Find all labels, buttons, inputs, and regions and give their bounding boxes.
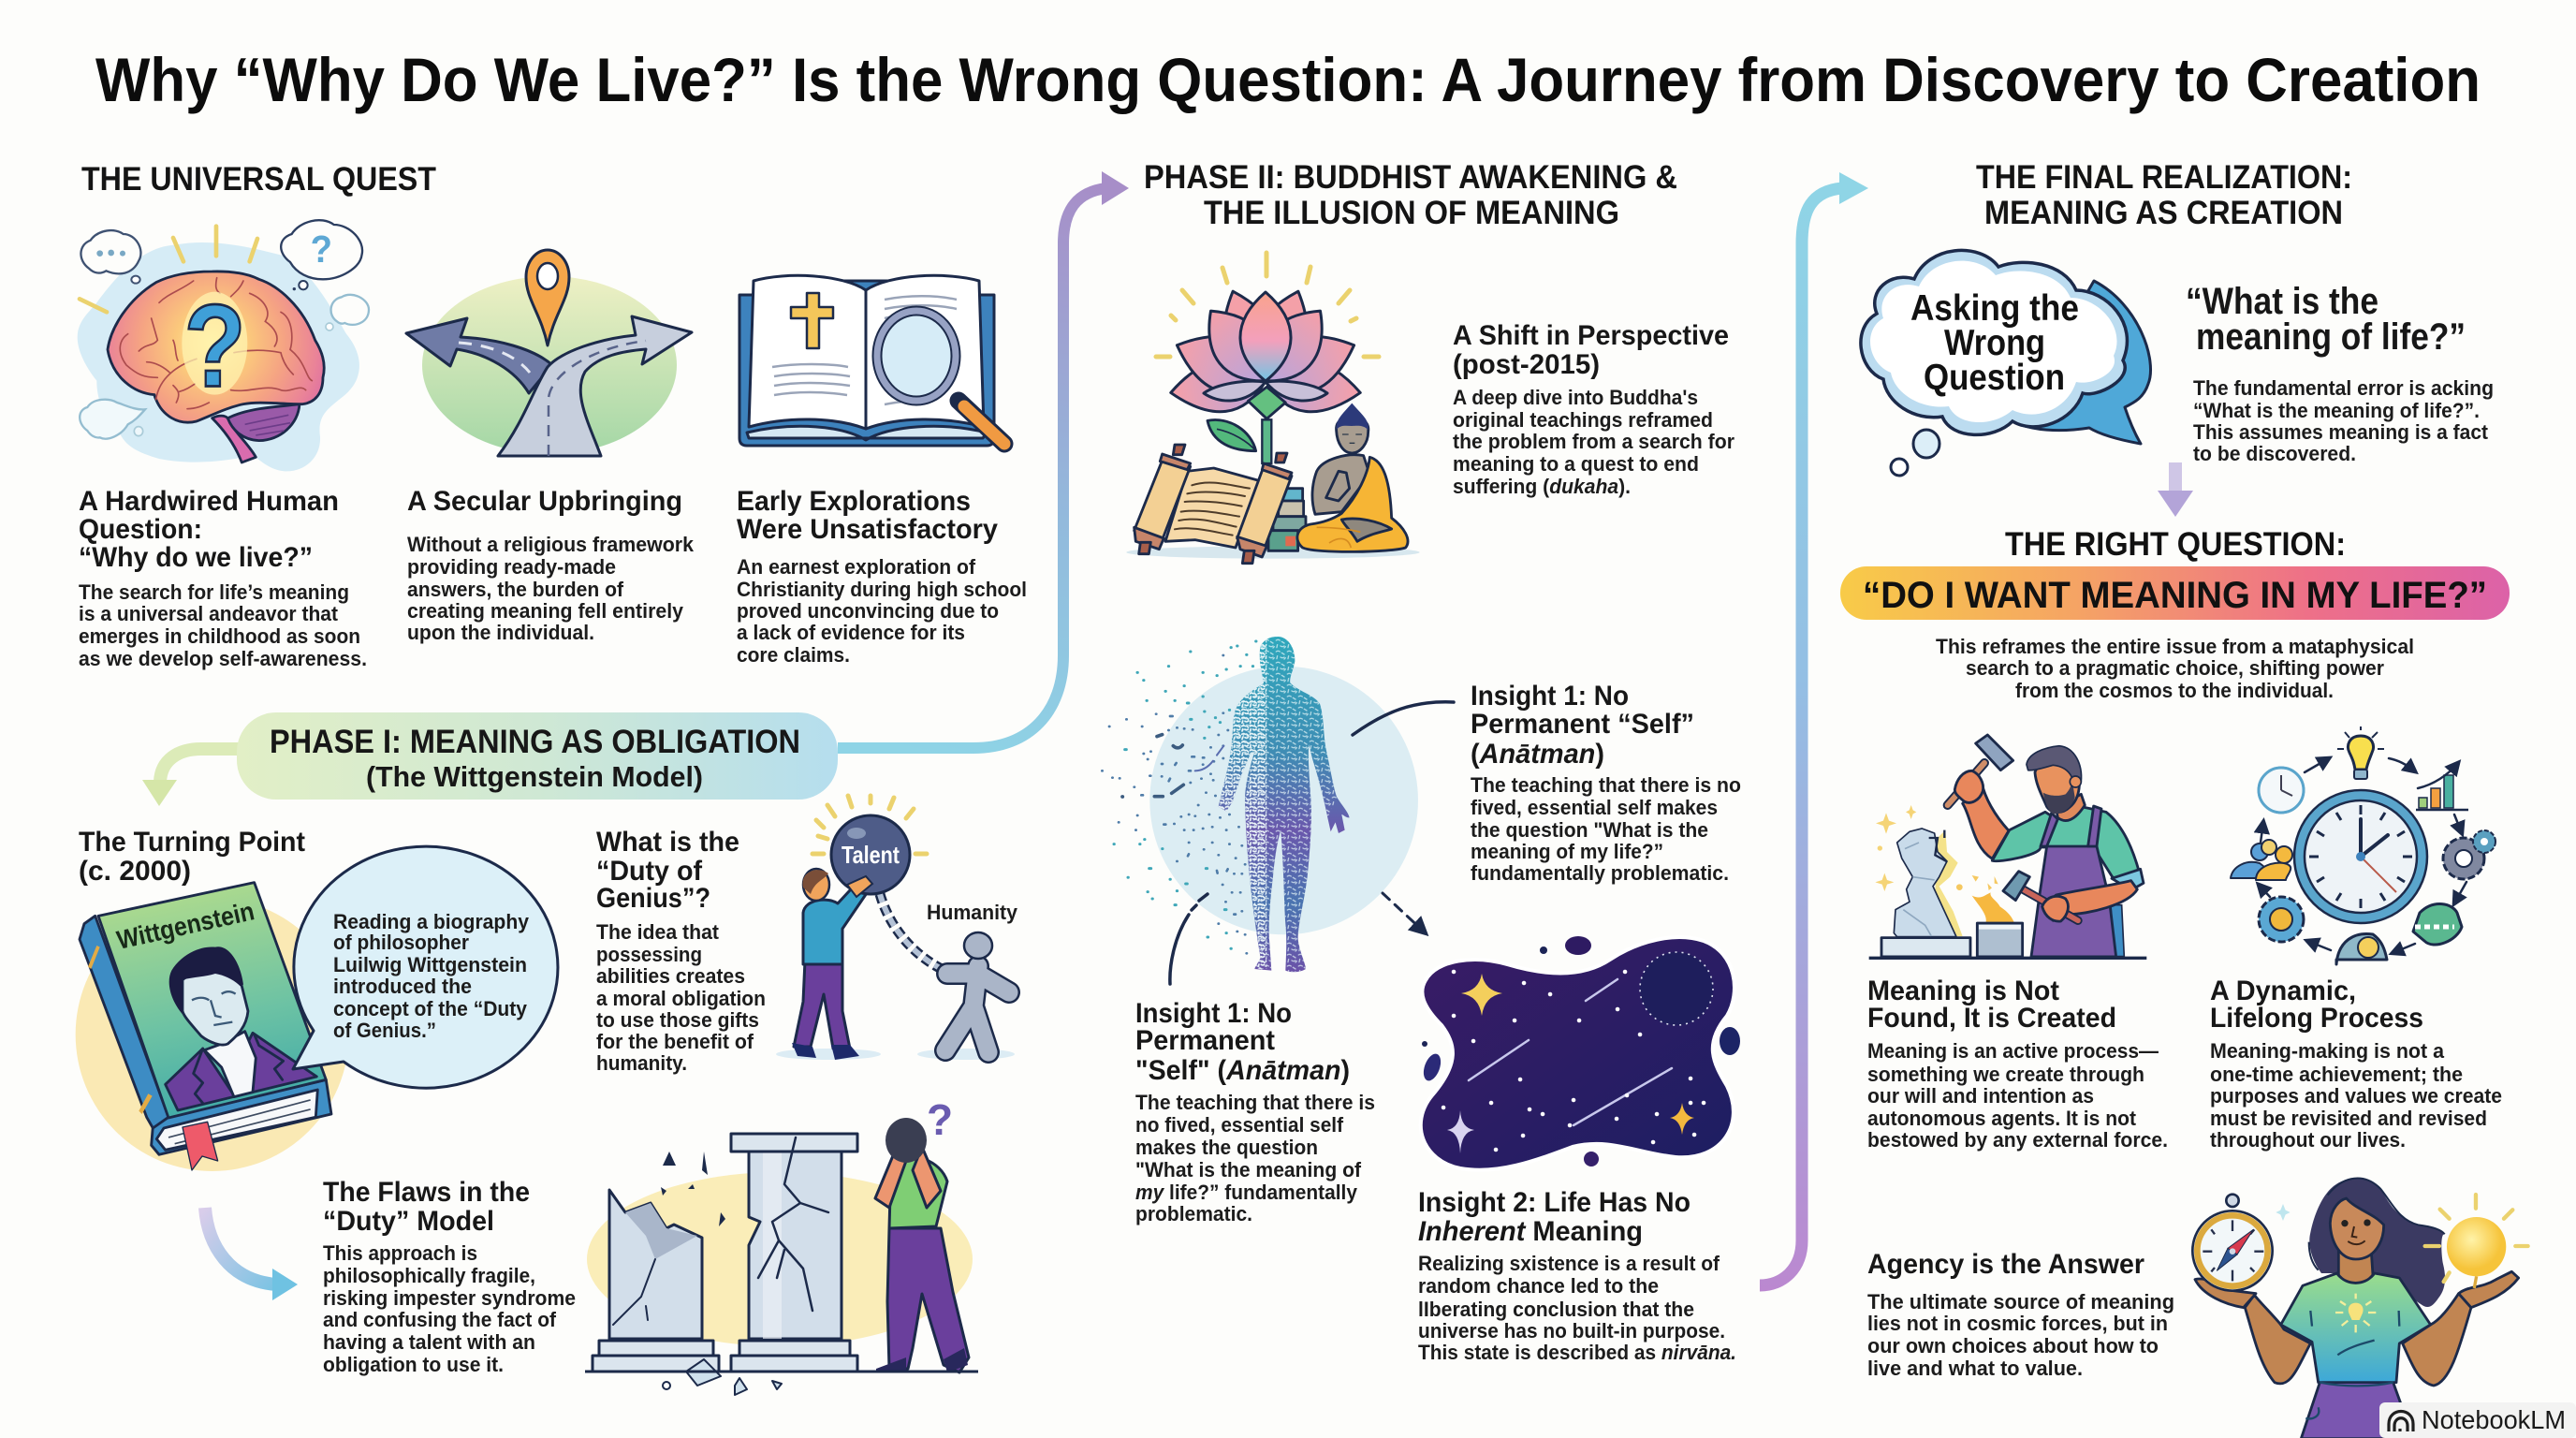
text block: secular upbringing: providing ready-made <box>407 555 616 579</box>
text block: duty of genius: “Duty of <box>596 856 703 887</box>
text block: duty of genius: humanity. <box>596 1051 687 1075</box>
text block: a shift in perspective: the problem from a search for <box>1453 430 1734 453</box>
text block: meaning is not found: bestowed by any external force. <box>1867 1128 2168 1152</box>
text block: secular upbringing: Without a religious framework <box>407 533 694 556</box>
text block: flaws in the duty model: This approach is <box>323 1241 477 1265</box>
text block: secular upbringing <box>407 486 694 644</box>
icon: open bible with magnifying glass <box>739 275 1004 446</box>
text block: agency is the answer: our own choices about how to <box>1867 1334 2159 1357</box>
icon: lotus flower <box>1156 253 1379 418</box>
section heading: The Universal Quest: THE UNIVERSAL QUEST <box>81 161 436 198</box>
text block: flaws in the duty model <box>323 1177 576 1376</box>
arrow: down to right question <box>2158 462 2193 517</box>
text block: dynamic lifelong process: throughout our lives. <box>2210 1128 2406 1152</box>
text block: flaws in the duty model: and confusing the fact of <box>323 1308 556 1331</box>
section heading: final realization: THE FINAL REALIZATION: <box>1976 159 2352 196</box>
text block: early explorations: a lack of evidence for its <box>737 621 965 644</box>
text block: insight 1 right: the question "What is the <box>1471 818 1708 842</box>
title: Why “Why Do We Live?” Is the Wrong Question: A Journey from Discovery to Creation <box>95 45 2481 114</box>
text block: insight 1 right <box>1471 681 1741 885</box>
text block: meaning is not found: Meaning is an active process— <box>1867 1039 2159 1063</box>
icon: broken pillars and worried person <box>585 1095 978 1395</box>
icon: person lifting talent ball chained to humanity <box>776 796 1018 1060</box>
section heading: Phase II: PHASE II: BUDDHIST AWAKENING & <box>1144 159 1677 196</box>
text block: a shift in perspective: original teachings reframed <box>1453 408 1713 432</box>
text block: insight 2 <box>1418 1187 1736 1364</box>
text block: duty of genius <box>596 827 766 1075</box>
text block: insight 1 right: The teaching that there is no <box>1471 773 1741 797</box>
icon: scroll, books and Buddha <box>1126 387 1420 564</box>
heading: the right question: THE RIGHT QUESTION: <box>2005 526 2346 563</box>
text block: hardwired human question: Question: <box>79 514 202 545</box>
text block: secular upbringing: answers, the burden of <box>407 578 623 601</box>
text block: the turning point <box>79 827 305 887</box>
text block: insight 1 left: Insight 1: No <box>1135 998 1292 1029</box>
phase I banner: PHASE I: MEANING AS OBLIGATION <box>270 724 800 760</box>
text block: a shift in perspective: meaning to a quest to end <box>1453 452 1699 476</box>
text block: meaning is not found: our will and intention as <box>1867 1084 2094 1108</box>
leader lines from figure <box>1170 702 1454 984</box>
speech bubble: biography <box>293 846 558 1088</box>
text block: a shift in perspective: (post-2015) <box>1453 349 1600 380</box>
text block: secular upbringing: creating meaning fell entirely <box>407 599 683 623</box>
text block: agency is the answer: Agency is the Answer <box>1867 1249 2144 1280</box>
text block: secular upbringing: upon the individual. <box>407 621 594 644</box>
text block: flaws in the duty model: having a talent with an <box>323 1330 535 1354</box>
speech bubble: biography: introduced the <box>333 975 472 998</box>
speech bubble: biography: concept of the “Duty <box>333 997 527 1020</box>
speech bubble: biography: of philosopher <box>333 931 469 954</box>
icon: dissolving human figure <box>1102 637 1418 972</box>
icon: craftsman sculpting statue <box>1869 735 2146 958</box>
text block: early explorations <box>737 486 1027 667</box>
text block: insight 2: universe has no built-in purpose. <box>1418 1319 1725 1343</box>
icon: brain with question mark: ? <box>311 227 332 271</box>
NotebookLM watermark <box>2379 1402 2576 1438</box>
text block: duty of genius: The idea that <box>596 920 719 944</box>
text block: meaning is not found: autonomous agents. It is not <box>1867 1107 2136 1130</box>
text block: insight 2: Inherent Meaning <box>1418 1216 1643 1247</box>
text block: flaws in the duty model: risking impester syndrome <box>323 1286 576 1310</box>
text block: early explorations: Were Unsatisfactory <box>737 514 998 545</box>
icon: asking the wrong question cloud: Asking the <box>1910 288 2079 329</box>
text block: duty of genius: possessing <box>596 943 702 966</box>
text block: reframes <box>1936 635 2414 702</box>
text block: hardwired human question <box>79 486 367 670</box>
text block: a shift in perspective <box>1453 320 1734 498</box>
arrow: turning point to flaws <box>205 1208 298 1300</box>
text block: insight 1 left: The teaching that there is <box>1135 1091 1375 1114</box>
text block: the turning point: The Turning Point <box>79 827 305 858</box>
icon: clock with life cycle <box>2231 726 2496 964</box>
text block: insight 1 right: fundamentally problematic. <box>1471 861 1729 885</box>
text block: insight 1 right: meaning of my life?” <box>1471 840 1663 863</box>
text block: early explorations: Christianity during high school <box>737 578 1027 601</box>
text block: early explorations: core claims. <box>737 643 850 667</box>
icon: person lifting talent ball chained to humanity: Talent <box>842 841 900 869</box>
text block: what is the meaning of life: The fundamental error is acking <box>2193 376 2494 400</box>
text block: a shift in perspective: A deep dive into Buddha's <box>1453 386 1698 409</box>
text block: duty of genius: abilities creates <box>596 964 745 988</box>
text block: insight 2: lIberating conclusion that the <box>1418 1298 1694 1321</box>
icon: asking the wrong question cloud: Wrong <box>1944 323 2045 363</box>
text block: early explorations: An earnest exploration of <box>737 555 975 579</box>
text block: a shift in perspective: suffering (dukaha). <box>1453 475 1631 498</box>
speech bubble: biography: of Genius.” <box>333 1019 436 1042</box>
text block: meaning is not found: something we create through <box>1867 1063 2144 1086</box>
icon: woman holding compass and sun <box>2192 1178 2528 1438</box>
text block: flaws in the duty model: “Duty” Model <box>323 1206 494 1237</box>
icon: asking the wrong question cloud: Question <box>1924 358 2065 398</box>
icon: Wittgenstein book: Wittgenstein <box>114 896 256 955</box>
text block: agency is the answer: The ultimate source of meaning <box>1867 1290 2174 1313</box>
text block: what is the meaning of life: This assumes meaning is a fact <box>2193 420 2488 444</box>
text block: reframes: This reframes the entire issue from a mataphysical <box>1936 635 2414 658</box>
icon: cosmos blob <box>1420 936 1740 1170</box>
text block: insight 1 left: Permanent <box>1135 1025 1275 1056</box>
section heading: final realization <box>1976 159 2352 231</box>
icon: Wittgenstein book <box>76 883 349 1171</box>
text block: agency is the answer <box>1867 1249 2174 1380</box>
text block: dynamic lifelong process: Lifelong Process <box>2210 1003 2423 1034</box>
text block: flaws in the duty model: obligation to use it. <box>323 1353 504 1376</box>
text block: early explorations: Early Explorations <box>737 486 971 517</box>
text block: hardwired human question: as we develop self-awareness. <box>79 647 367 670</box>
text block: insight 1 left: problematic. <box>1135 1202 1252 1225</box>
text block: what is the meaning of life: “What is the meaning of life?”. <box>2193 399 2480 422</box>
text block: what is the meaning of life: meaning of life?” <box>2196 316 2466 358</box>
text block: insight 1 left: "What is the meaning of <box>1135 1158 1361 1181</box>
text block: insight 2: This state is described as nirvāna. <box>1418 1341 1736 1364</box>
text block: hardwired human question: emerges in childhood as soon <box>79 624 360 648</box>
text block: insight 2: Realizing sxistence is a result of <box>1418 1252 1720 1275</box>
text block: agency is the answer: lies not in cosmic forces, but in <box>1867 1312 2168 1335</box>
banner: do I want meaning: “DO I WANT MEANING IN MY LIFE?” <box>1863 575 2487 616</box>
text block: hardwired human question: The search for life’s meaning <box>79 580 349 604</box>
text block: dynamic lifelong process <box>2210 976 2502 1152</box>
text block: flaws in the duty model: philosophically fragile, <box>323 1264 535 1287</box>
text block: insight 1 right: Insight 1: No <box>1471 681 1629 712</box>
text block: a shift in perspective: A Shift in Perspective <box>1453 320 1729 351</box>
text block: hardwired human question: “Why do we live?” <box>79 542 313 573</box>
arrow: into Phase I <box>142 749 242 806</box>
speech bubble: biography: Reading a biography <box>333 910 529 933</box>
arrow: Phase I to Phase II <box>838 171 1129 748</box>
text block: dynamic lifelong process: A Dynamic, <box>2210 976 2356 1006</box>
icon: brain with question mark <box>78 220 369 471</box>
icon: person lifting talent ball chained to humanity: Humanity <box>927 901 1018 924</box>
text block: meaning is not found <box>1867 976 2168 1152</box>
text block: insight 1 left: my life?” fundamentally <box>1135 1181 1357 1204</box>
text block: duty of genius: What is the <box>596 827 739 858</box>
text block: insight 1 left <box>1135 998 1375 1225</box>
speech bubble: biography: Luilwig Wittgenstein <box>333 953 527 976</box>
NotebookLM watermark: NotebookLM <box>2422 1405 2566 1434</box>
text block: dynamic lifelong process: purposes and values we create <box>2210 1084 2502 1108</box>
text block: reframes: search to a pragmatic choice, shifting power <box>1966 656 2384 680</box>
text block: early explorations: proved unconvincing due to <box>737 599 999 623</box>
arrow: Phase II to Final Realization <box>1760 172 1868 1285</box>
text block: what is the meaning of life: to be discovered. <box>2193 442 2356 465</box>
section heading: final realization: MEANING AS CREATION <box>1984 195 2343 231</box>
text block: what is the meaning of life <box>2186 281 2494 465</box>
text block: insight 2: random chance led to the <box>1418 1274 1659 1298</box>
text block: insight 1 right: (Anātman) <box>1471 739 1604 770</box>
text block: the turning point: (c. 2000) <box>79 856 191 887</box>
phase I banner: (The Wittgenstein Model) <box>366 760 703 793</box>
text block: secular upbringing: A Secular Upbringing <box>407 486 682 517</box>
section heading: Phase II: THE ILLUSION OF MEANING <box>1204 195 1619 231</box>
text block: duty of genius: to use those gifts <box>596 1008 759 1032</box>
text block: insight 1 left: "Self" (Anātman) <box>1135 1055 1350 1086</box>
text block: duty of genius: for the benefit of <box>596 1030 754 1053</box>
text block: insight 1 left: makes the question <box>1135 1136 1318 1159</box>
text block: insight 1 right: Permanent “Self” <box>1471 709 1694 740</box>
text block: meaning is not found: Found, It is Created <box>1867 1003 2116 1034</box>
icon: asking the wrong question cloud <box>1861 250 2151 476</box>
text block: meaning is not found: Meaning is Not <box>1867 976 2059 1006</box>
phase I banner <box>237 712 838 800</box>
text block: duty of genius: Genius”? <box>596 883 710 914</box>
text block: hardwired human question: A Hardwired Human <box>79 486 339 517</box>
icon: broken pillars and worried person: ? <box>927 1095 953 1144</box>
text block: hardwired human question: is a universal andeavor that <box>79 602 338 625</box>
text block: insight 1 left: no fived, essential self <box>1135 1113 1343 1137</box>
text block: what is the meaning of life: “What is the <box>2186 281 2378 322</box>
text block: dynamic lifelong process: Meaning-making is not a <box>2210 1039 2444 1063</box>
text block: dynamic lifelong process: must be revisited and revised <box>2210 1107 2487 1130</box>
text block: insight 2: Insight 2: Life Has No <box>1418 1187 1690 1218</box>
text block: agency is the answer: live and what to value. <box>1867 1357 2083 1380</box>
icon: crossroads with map pin <box>406 250 692 456</box>
text block: duty of genius: a moral obligation <box>596 987 766 1010</box>
text block: flaws in the duty model: The Flaws in the <box>323 1177 530 1208</box>
section heading: Phase II <box>1144 159 1677 231</box>
icon: brain with question mark: ? <box>184 282 246 412</box>
text block: reframes: from the cosmos to the individual. <box>2015 679 2334 702</box>
text block: dynamic lifelong process: one-time achievement; the <box>2210 1063 2463 1086</box>
text block: insight 1 right: fived, essential self makes <box>1471 796 1718 819</box>
